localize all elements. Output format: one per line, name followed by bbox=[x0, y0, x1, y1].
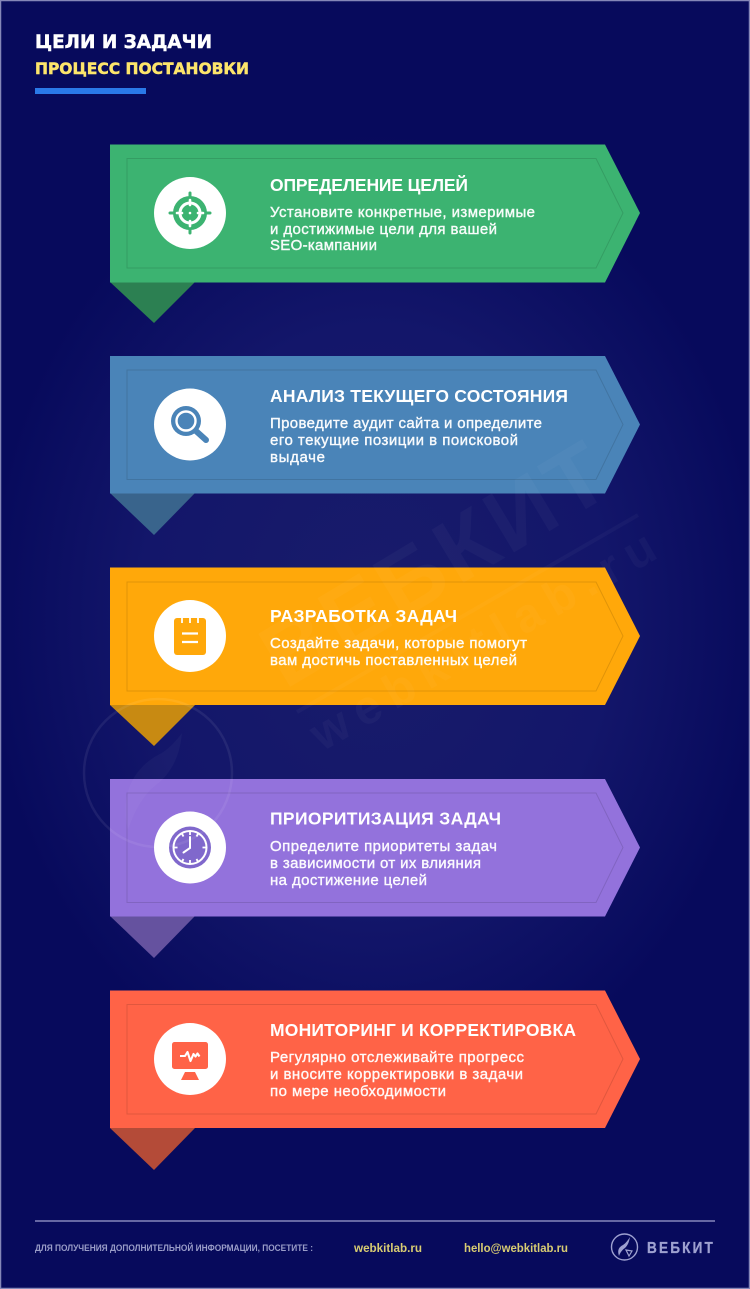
ribbon tail bbox=[110, 282, 195, 323]
ribbon body bbox=[110, 990, 640, 1128]
icon circle bbox=[154, 388, 226, 460]
inner outline bbox=[127, 158, 623, 268]
step description bbox=[270, 635, 527, 669]
step description: выдаче bbox=[270, 449, 325, 466]
ribbon tail bbox=[110, 916, 195, 958]
step description: Создайте задачи, которые помогут bbox=[270, 635, 527, 652]
inner outline bbox=[127, 1004, 623, 1114]
ribbon tail bbox=[110, 493, 195, 535]
footer note: ДЛЯ ПОЛУЧЕНИЯ ДОПОЛНИТЕЛЬНОЙ ИНФОРМАЦИИ, ПОСЕТИТЕ : bbox=[35, 1242, 313, 1254]
step heading: АНАЛИЗ ТЕКУЩЕГО СОСТОЯНИЯ bbox=[270, 386, 568, 406]
step description: по мере необходимости bbox=[270, 1083, 446, 1100]
icon circle bbox=[154, 812, 226, 884]
icon: notepad bbox=[174, 618, 206, 655]
icon circle bbox=[154, 177, 226, 249]
step description: его текущие позиции в поисковой bbox=[270, 432, 518, 449]
step description: Определите приоритеты задач bbox=[270, 838, 497, 855]
panel: step 4, prioritising tasks bbox=[110, 779, 640, 958]
ribbon body bbox=[110, 144, 640, 282]
icon: magnifier bbox=[171, 406, 206, 440]
ribbon body bbox=[110, 779, 640, 916]
email link: hello@webkitlab.ru bbox=[464, 1241, 568, 1255]
panel: step 5, monitoring and correction bbox=[110, 990, 640, 1170]
step description: Проведите аудит сайта и определите bbox=[270, 415, 542, 432]
panel: step 1, setting goals bbox=[110, 144, 640, 323]
inner outline bbox=[127, 370, 623, 480]
website link: webkitlab.ru bbox=[353, 1241, 422, 1255]
step description: Установите конкретные, измеримые bbox=[270, 204, 535, 221]
icon: target bbox=[170, 193, 210, 233]
step heading: РАЗРАБОТКА ЗАДАЧ bbox=[270, 606, 457, 626]
step description: Регулярно отслеживайте прогресс bbox=[270, 1049, 524, 1066]
step description bbox=[270, 1049, 524, 1100]
subtitle: ПРОЦЕСС ПОСТАНОВКИ bbox=[35, 59, 249, 78]
step description: в зависимости от их влияния bbox=[270, 855, 481, 872]
panel: step 2, current state analysis bbox=[110, 356, 640, 535]
step heading: ОПРЕДЕЛЕНИЕ ЦЕЛЕЙ bbox=[270, 174, 468, 195]
watermark: webkitlab.ru bbox=[300, 521, 665, 762]
title: ЦЕЛИ И ЗАДАЧИ bbox=[35, 31, 212, 53]
step heading: ПРИОРИТИЗАЦИЯ ЗАДАЧ bbox=[270, 808, 501, 828]
inner outline bbox=[127, 793, 623, 902]
step description bbox=[270, 838, 497, 889]
icon circle bbox=[154, 600, 226, 672]
step description bbox=[270, 415, 542, 466]
title underline bbox=[35, 88, 146, 94]
step description: вам достичь поставленных целей bbox=[270, 652, 517, 669]
ribbon body bbox=[110, 568, 640, 705]
logo: ВЕБКИТ bbox=[647, 1240, 715, 1257]
step description: и достижимые цели для вашей bbox=[270, 221, 497, 238]
icon: clock bbox=[169, 826, 211, 868]
ribbon tail bbox=[110, 705, 195, 746]
title block bbox=[35, 31, 249, 94]
panel: step 3, developing tasks bbox=[110, 568, 640, 746]
logo bbox=[612, 1234, 715, 1260]
step description: и вносите корректировки в задачи bbox=[270, 1066, 523, 1083]
icon: monitor with pulse bbox=[172, 1042, 208, 1080]
inner outline bbox=[127, 582, 623, 691]
footer bbox=[35, 1221, 715, 1260]
step description: на достижение целей bbox=[270, 872, 427, 889]
step heading: МОНИТОРИНГ И КОРРЕКТИРОВКА bbox=[270, 1020, 576, 1040]
step description bbox=[270, 204, 535, 254]
watermark bbox=[84, 423, 665, 847]
watermark: ВЕБКИТ bbox=[244, 423, 625, 707]
ribbon body bbox=[110, 356, 640, 494]
icon circle bbox=[154, 1023, 226, 1095]
ribbon tail bbox=[110, 1128, 195, 1170]
step description: SEO-кампании bbox=[270, 237, 377, 254]
